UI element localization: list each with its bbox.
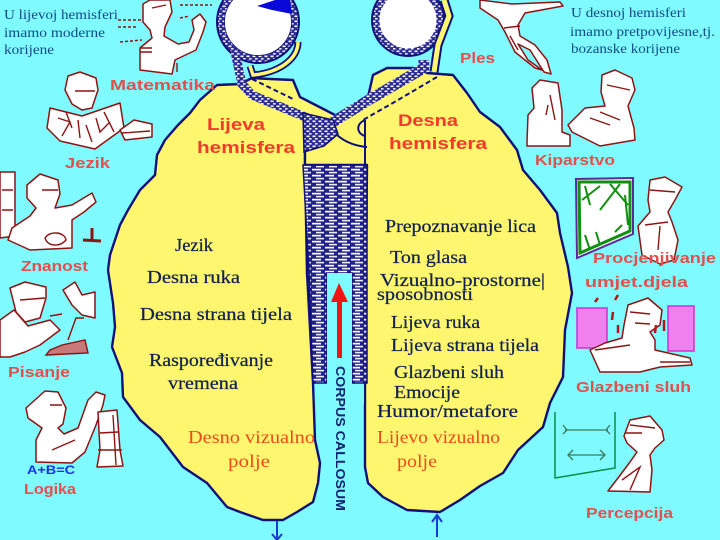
text: right hemisphere functions: Lijeva ruka: [391, 312, 480, 332]
icon: reader with book: [47, 72, 152, 149]
label: Procjenjivanje: Procjenjivanje: [593, 250, 716, 267]
corpus callosum: [303, 165, 367, 385]
label: umjet.djela: umjet.djela: [585, 274, 689, 291]
text: right visual field of left hemisphere: [188, 427, 315, 471]
text: left visual field of right hemisphere: polje: [397, 451, 437, 471]
left optic stalk: [235, 42, 322, 124]
left eye: [217, 0, 299, 63]
note: left hemisphere roots: U lijevoj hemisferi: [4, 7, 118, 22]
heading: right hemisphere: hemisfera: [389, 134, 488, 153]
icon: scientist with instrument: [0, 172, 101, 250]
note: left hemisphere roots: korijene: [4, 42, 54, 57]
text: left visual field of right hemisphere: Lijevo vizualno: [377, 427, 500, 447]
heading: left hemisphere: Lijeva: [207, 115, 266, 134]
channel between hemispheres: [316, 384, 364, 404]
note: left hemisphere roots: [4, 7, 118, 57]
icon: child with blocks: [26, 391, 123, 467]
heading: right hemisphere: [389, 111, 488, 153]
arrow: down: [272, 521, 282, 540]
arrow: up: [432, 515, 442, 537]
icon: art appraiser: [638, 177, 682, 264]
note: right hemisphere roots: [570, 5, 715, 56]
label: A+B=C: A+B=C: [27, 463, 75, 477]
note: right hemisphere roots: U desnoj hemisferi: [571, 5, 686, 20]
label: Logika: Logika: [24, 481, 77, 498]
text: right hemisphere functions: [377, 216, 545, 421]
label: Percepcija: Percepcija: [586, 505, 674, 522]
text: right hemisphere functions: Humor/metafore: [377, 401, 518, 421]
text: right hemisphere functions: Vizualno-prostorne|: [380, 270, 545, 290]
text: left hemisphere functions: Desna strana tijela: [140, 304, 292, 324]
note: left hemisphere roots: imamo moderne: [4, 25, 105, 40]
heading: left hemisphere: [197, 115, 296, 157]
right optic stalk: [333, 0, 449, 165]
right eye: [372, 0, 444, 56]
icon: sculptor with statue: [527, 70, 635, 146]
icon: writer at typewriter: [0, 282, 95, 357]
heading: left hemisphere: hemisfera: [197, 138, 296, 157]
label: Ples: Ples: [460, 50, 495, 67]
label: Jezik: Jezik: [65, 155, 111, 172]
arrow: corpus callosum: [331, 283, 348, 358]
label: Matematika: Matematika: [110, 77, 216, 94]
label: corpus callosum: CORPUS CALLOSUM: [333, 366, 347, 511]
left hemisphere: [108, 78, 337, 520]
text: right hemisphere functions: Glazbeni sluh: [394, 362, 504, 382]
heading: right hemisphere: Desna: [398, 111, 459, 130]
text: left hemisphere functions: Jezik: [175, 235, 213, 255]
text: right hemisphere functions: Ton glasa: [390, 247, 467, 267]
text: left hemisphere functions: Desna ruka: [147, 267, 240, 287]
label: Znanost: Znanost: [21, 258, 88, 275]
text: right visual field of left hemisphere: Desno vizualno: [188, 427, 315, 447]
text: right hemisphere functions: sposobnosti: [377, 284, 473, 304]
optic chiasm: [303, 113, 338, 152]
text: left visual field of right hemisphere: [377, 427, 500, 471]
icon: mathematician: [118, 0, 212, 74]
text: left hemisphere functions: vremena: [168, 373, 238, 393]
note: right hemisphere roots: imamo pretpovijesne,tj.: [570, 24, 715, 39]
text: left hemisphere functions: [140, 235, 292, 393]
label: Kiparstvo: Kiparstvo: [535, 152, 615, 169]
text: right hemisphere functions: Prepoznavanje lica: [385, 216, 536, 236]
label: Pisanje: Pisanje: [8, 364, 70, 381]
label: Glazbeni sluh: Glazbeni sluh: [576, 379, 691, 396]
text: left hemisphere functions: Raspoređivanje: [149, 350, 273, 370]
note: right hemisphere roots: bozanske korijene: [571, 41, 680, 56]
icon: illusion frame: [555, 412, 615, 478]
text: right visual field of left hemisphere: polje: [228, 451, 270, 471]
icon: dancer: [480, 0, 563, 74]
brain diagram: [108, 0, 572, 520]
text: right hemisphere functions: Lijeva strana tijela: [391, 335, 539, 355]
icon: music listener: [577, 295, 694, 372]
right hemisphere: [305, 68, 572, 512]
icon: framed painting: [576, 178, 633, 258]
icon: observer profile: [608, 416, 664, 492]
text: right hemisphere functions: Emocije: [394, 382, 460, 402]
